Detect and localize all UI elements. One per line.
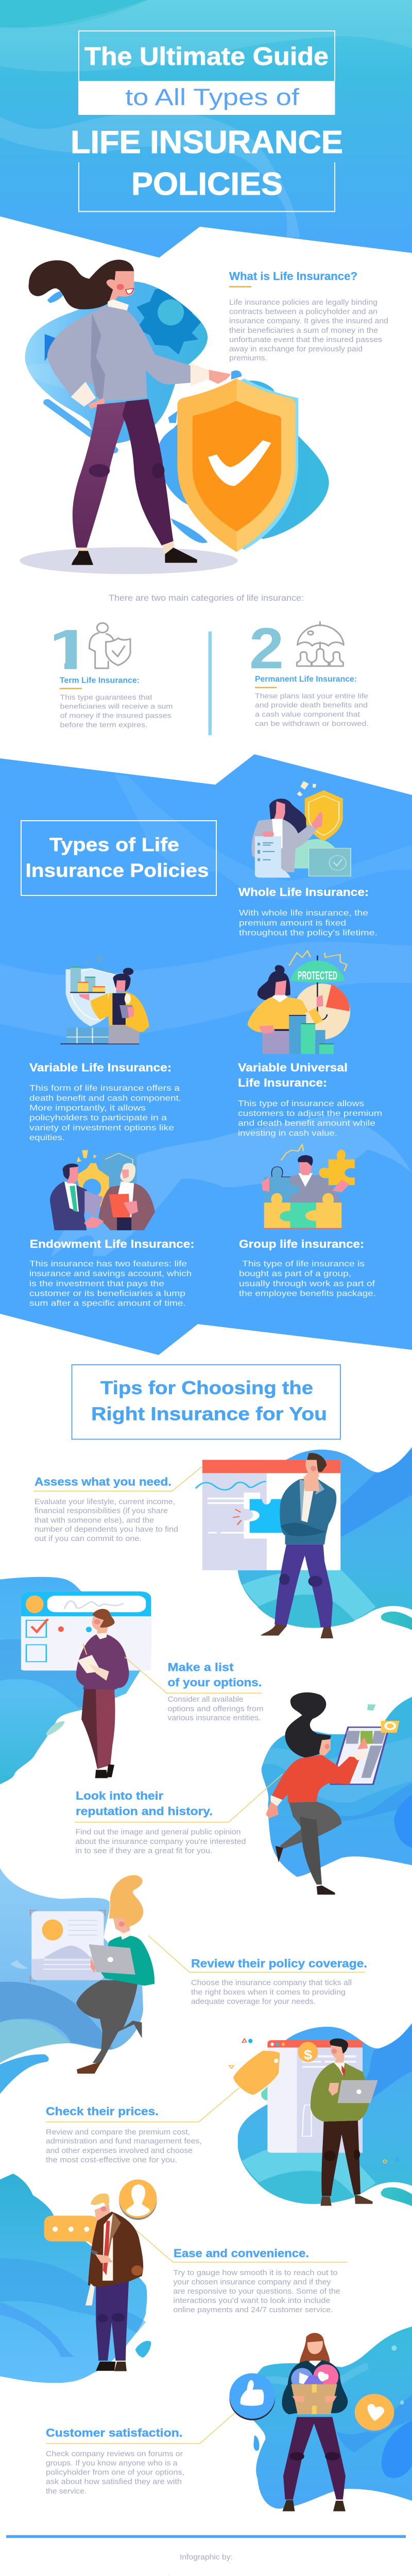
tip 1 text: out if you can commit to one.	[35, 1535, 142, 1543]
category 2: permanent life: 2	[249, 616, 284, 681]
tip 5 text	[46, 2088, 239, 2164]
what is life insurance text: premiums.	[229, 354, 267, 363]
tip 6 illustration	[0, 2174, 157, 2383]
hero background	[0, 0, 412, 258]
icon: person with shield	[89, 623, 130, 668]
footer	[6, 2535, 406, 2576]
what is life insurance text: What is Life Insurance?	[229, 270, 357, 282]
group life text: usually through work as part of	[239, 1279, 375, 1288]
tip 7 text	[46, 2413, 235, 2496]
tip 5 figure: man with laptop	[311, 2039, 378, 2206]
variable life text: equities.	[29, 1133, 65, 1142]
tip 4 illustration	[0, 1868, 143, 2094]
what is life insurance text: Life insurance policies are legally binding	[229, 298, 377, 307]
variable life text: More importantly, it allows	[29, 1104, 146, 1113]
category 1: term life: This type guarantees that	[60, 693, 152, 701]
variable universal text: Variable Universal	[238, 1061, 348, 1074]
variable universal text: This type of insurance allows	[238, 1099, 364, 1108]
category 1: term life: beneficiaries will receive a sum	[60, 702, 173, 710]
title: LIFE INSURANCE	[71, 125, 343, 160]
heading: types of life insurance policies: Types of Life	[49, 834, 179, 855]
whole life text: throughout the policy's lifetime.	[239, 928, 377, 937]
tip 2 text: Consider all available	[168, 1696, 243, 1704]
tip 2 illustration	[0, 1577, 151, 1784]
tip 1 text: number of dependents you have to find	[35, 1526, 178, 1534]
endowment text: sum after a specific amount of time.	[29, 1299, 186, 1308]
icon: umbrella over people	[297, 622, 344, 666]
category 2: permanent life	[249, 616, 369, 727]
group life text: the employee benefits package.	[239, 1290, 376, 1298]
category 1: term life: before the term expires.	[60, 720, 147, 728]
category 2: permanent life: and provide death benefits and	[255, 701, 368, 709]
title: The Ultimate Guide	[84, 43, 329, 71]
heading: tips: Tips for Choosing the	[100, 1377, 313, 1398]
label: dollar sign: $	[304, 2047, 313, 2062]
tip 1 text: that with someone else), and the	[35, 1516, 154, 1524]
group life text: Group life insurance:	[239, 1238, 364, 1250]
what is life insurance text: insurance company. It gives the insured and	[229, 317, 388, 326]
group life text: This type of life insurance is	[242, 1260, 365, 1268]
tip 1 text: Evaluate your lifestyle, current income,	[35, 1498, 175, 1506]
heading: tips: Right Insurance for You	[91, 1403, 327, 1424]
what is life insurance text: unfortunate event that the insured passes	[229, 335, 382, 344]
tip 7 figure: woman with box	[282, 2333, 348, 2511]
heading: tips	[72, 1365, 340, 1439]
tip 2 text	[125, 1657, 264, 1722]
tip 2 figure: man with notepad	[76, 1609, 129, 1778]
variable universal text: customers to adjust the premium	[238, 1109, 382, 1118]
variable life text: variety of investment options like	[29, 1124, 174, 1132]
variable life text: This form of life insurance offers a	[29, 1084, 180, 1093]
category 1: term life: Term Life Insurance:	[60, 676, 140, 685]
tip 3 figure: woman with tablet	[266, 1692, 400, 1894]
types section background	[0, 754, 412, 1355]
tip 4 text: Review their policy coverage.	[191, 1957, 367, 1970]
heading: types of life insurance policies	[21, 821, 216, 895]
tip 3 text: Look into their	[76, 1789, 163, 1802]
endowment text: Endowment Life Insurance:	[30, 1238, 195, 1250]
category 2: permanent life: can be withdrawn or borrowed.	[255, 719, 369, 727]
variable universal text	[238, 1061, 382, 1138]
tip 3 text	[75, 1774, 282, 1855]
endowment text: customer or its beneficiaries a lump	[29, 1290, 185, 1298]
tip 2 text: Make a list	[168, 1661, 234, 1674]
tip 7 illustration	[229, 2327, 412, 2509]
tip 4 text	[148, 1936, 367, 2006]
tip 5 text: and other expenses involved and choose	[46, 2147, 193, 2155]
tip 5 text: Review and compare the premium cost,	[46, 2128, 190, 2137]
group life text: bought as part of a group,	[239, 1269, 351, 1278]
variable universal text: Life Insurance:	[238, 1076, 327, 1089]
tip 7 text: policyholder from one of your options,	[46, 2469, 184, 2477]
illustration: woman with shield	[20, 260, 329, 574]
tip 3 text: reputation and history.	[76, 1805, 213, 1818]
what is life insurance text: away in exchange for previously paid	[229, 345, 363, 353]
illustration: whole life woman	[251, 781, 351, 877]
tip 6 text: are responsive to your questions. Some of the	[173, 2287, 340, 2296]
tip 1 illustration	[196, 1447, 412, 1630]
tip 3 text: about the insurance company you're interested	[75, 1838, 246, 1846]
whole life text: premium amount is fixed	[239, 919, 346, 927]
tip 5 illustration	[229, 2023, 412, 2206]
tip 5 text: administration and fund management fees,	[46, 2138, 202, 2146]
endowment text: This insurance has two features: life	[29, 1260, 187, 1268]
tip 4 figure: woman with laptop	[76, 1875, 154, 2074]
whole life text	[238, 886, 377, 937]
category 2: permanent life: a cash value component that	[255, 710, 360, 718]
tip 3 text: Find out the image and general public opinion	[75, 1828, 241, 1837]
category 2: permanent life: These plans last your entire life	[255, 691, 368, 700]
tip 6 text: Try to gauge how smooth it is to reach out to	[173, 2269, 338, 2277]
whole life text: With whole life insurance, the	[239, 909, 368, 918]
what is life insurance text: their beneficiaries a sum of money in the	[229, 326, 378, 335]
category 1: term life	[54, 622, 172, 728]
category 1: term life: of money if the insured passes	[60, 711, 171, 720]
tip 7 text: Check company reviews on forums or	[46, 2450, 183, 2459]
heading: types of life insurance policies: Insurance Policies	[26, 860, 209, 881]
tip 7 text: Customer satisfaction.	[46, 2426, 183, 2439]
tip 6 text: interactions you'd want to look into include	[173, 2297, 331, 2305]
tip 4 text: the right boxes when it comes to providing	[191, 1988, 346, 1996]
variable life text: death benefit and cash component.	[29, 1094, 181, 1103]
tip 6 text: your chosen insurance company and if they	[173, 2278, 331, 2286]
tip 4 text: adequate coverage for your needs.	[191, 1997, 316, 2006]
tip 1 text: Assess what you need.	[35, 1476, 171, 1488]
illustration: variable universal woman	[248, 951, 350, 1054]
category 1: term life: 1	[44, 618, 95, 682]
title	[71, 31, 343, 211]
tip 7 text: groups. If you know anyone who is a	[46, 2459, 178, 2467]
tip 1 figure: thinking man	[261, 1453, 336, 1638]
tip 2 text: options and offerings from	[168, 1705, 264, 1713]
tip 1 text: financial responsibilities (if you share	[35, 1507, 168, 1515]
what is life insurance text	[229, 270, 388, 363]
title: POLICIES	[131, 166, 283, 202]
whole life text: Whole Life Insurance:	[238, 886, 369, 899]
illustration: variable life woman	[60, 955, 149, 1044]
tip 4 text: Choose the insurance company that ticks all	[191, 1979, 352, 1987]
label: protected: PROTECTED	[298, 969, 337, 982]
variable life text	[29, 1061, 181, 1142]
tip 6 text: Ease and convenience.	[174, 2247, 309, 2260]
variable universal text: and death benefit amount while	[238, 1119, 375, 1128]
tip 5 text: the most cost-effective one for you.	[46, 2156, 177, 2164]
endowment text: insurance and savings account, which	[29, 1269, 192, 1278]
tip 6 text	[136, 2230, 347, 2314]
group life text	[239, 1238, 376, 1298]
woman figure	[28, 260, 231, 565]
variable universal text: investing in cash value.	[238, 1129, 337, 1138]
tip 2 text: various insurance entities.	[168, 1714, 261, 1722]
endowment text	[29, 1238, 195, 1308]
illustration: endowment handshake	[50, 1150, 155, 1230]
tip 5 text: Check their prices.	[46, 2105, 159, 2117]
category 2: permanent life: Permanent Life Insurance:	[255, 675, 357, 684]
tip 7 text: ask about how satisfied they are with	[46, 2478, 182, 2486]
tip 3 illustration	[262, 1697, 412, 1877]
tip 2 text: of your options.	[168, 1676, 262, 1689]
tip 6 text: online payments and 24/7 customer service.	[173, 2306, 333, 2314]
footer: Infographic by:	[180, 2553, 233, 2562]
intro to categories: There are two main categories of life insurance:	[109, 594, 304, 603]
endowment text: is the investment that pays the	[29, 1279, 164, 1288]
what is life insurance text: contracts between a policyholder and an	[229, 308, 377, 316]
variable life text: policyholders to participate in a	[29, 1114, 167, 1123]
tip 6 figure: man with phone	[85, 2193, 143, 2371]
tip 3 text: in to see if they are a great fit for you.	[75, 1847, 212, 1855]
tip 1 text	[33, 1466, 202, 1543]
illustration: group life puzzle	[262, 1145, 355, 1229]
variable life text: Variable Life Insurance:	[29, 1061, 171, 1074]
tip 7 text: the service.	[46, 2487, 87, 2496]
title: to All Types of	[125, 84, 300, 110]
